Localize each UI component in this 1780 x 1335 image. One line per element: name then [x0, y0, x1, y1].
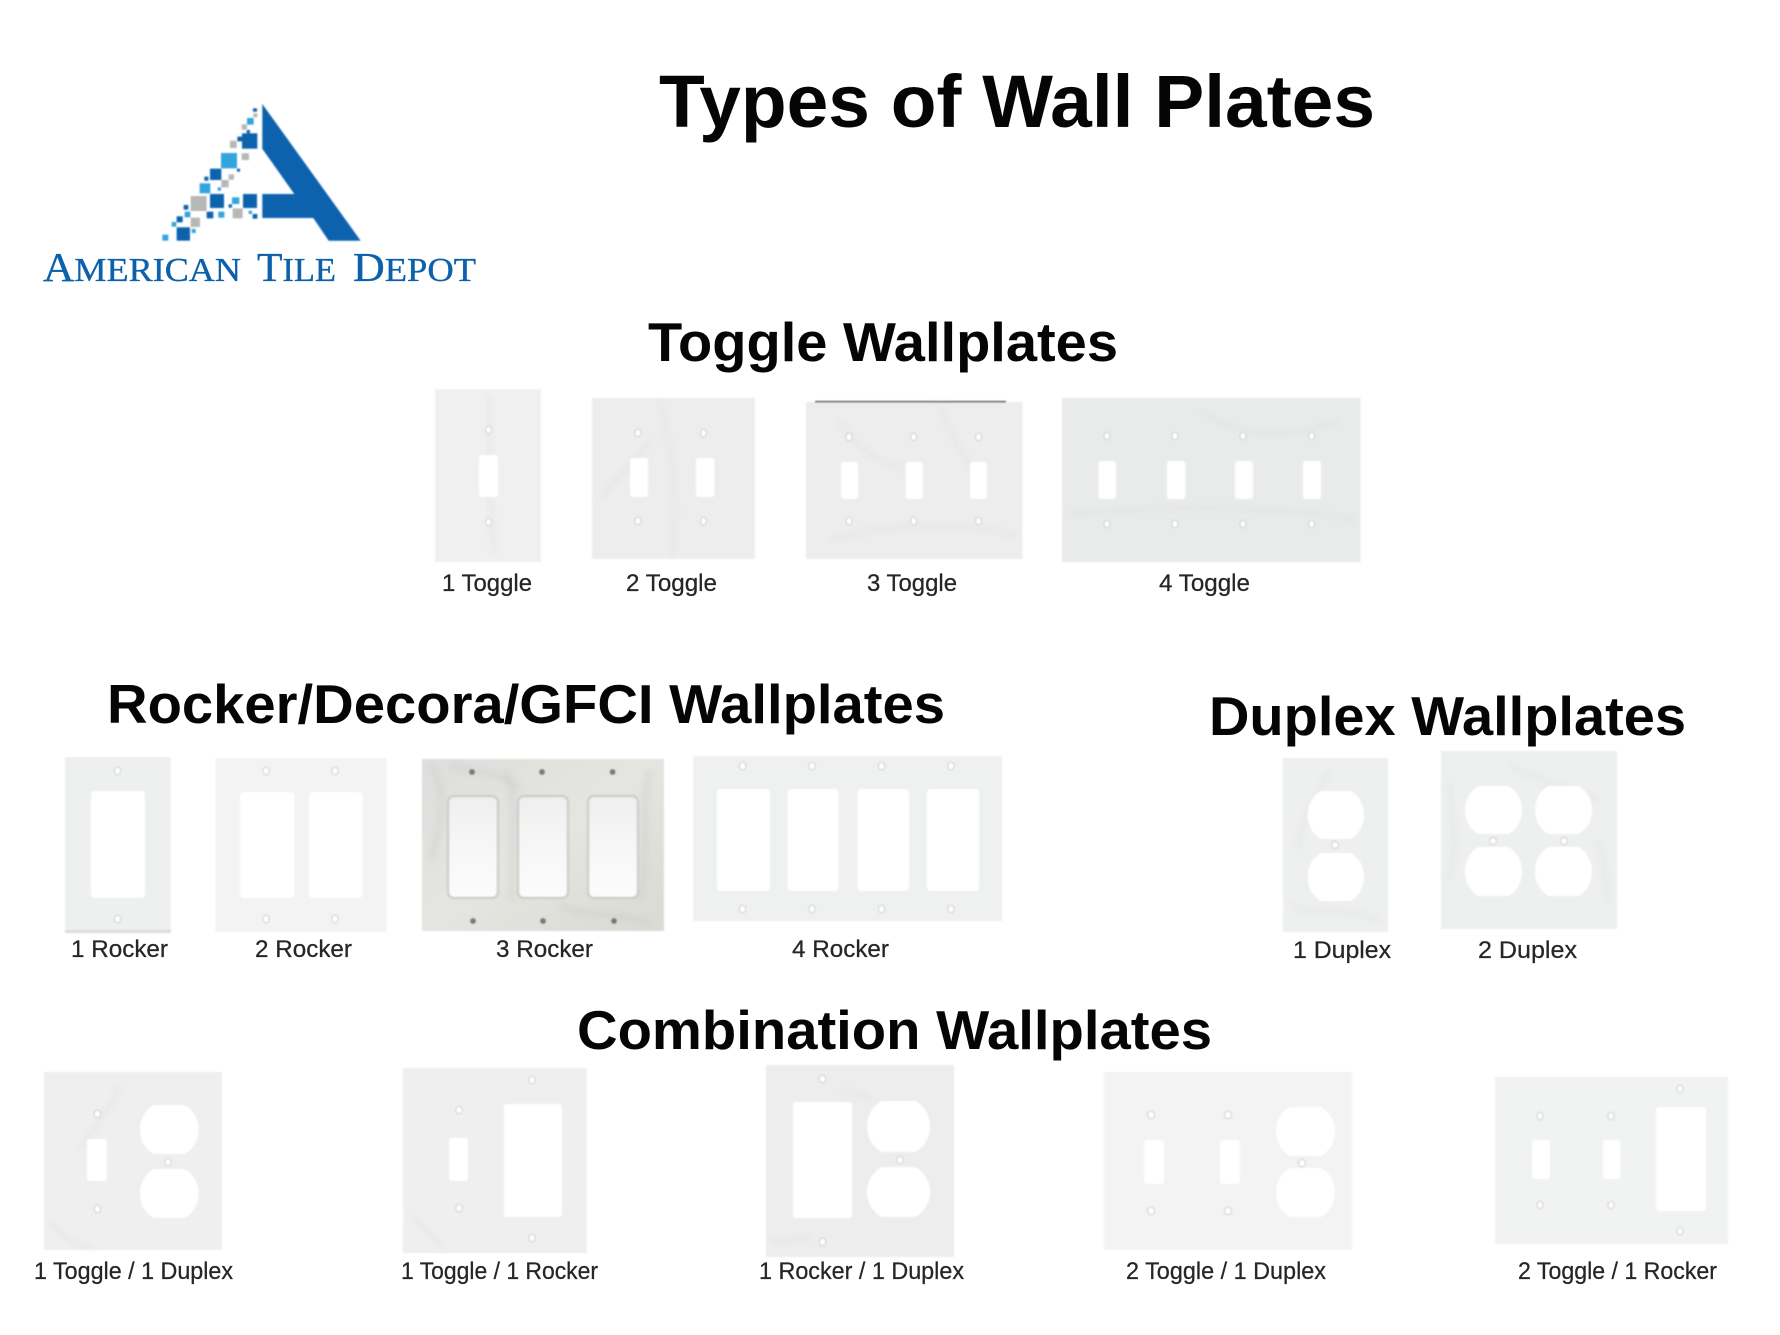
- label: 1 toggle / 1 duplex: 1 Toggle / 1 Duplex: [34, 1258, 233, 1285]
- plate: 1 toggle: [435, 389, 541, 562]
- plate: 2 duplex: [1441, 751, 1617, 929]
- icon: letter A mark: [162, 104, 361, 241]
- panel: combination wallplates: [34, 999, 1728, 1285]
- plate: 4 toggle: [1062, 398, 1361, 562]
- label: 2 toggle / 1 duplex: 2 Toggle / 1 Duplex: [1126, 1258, 1326, 1285]
- plate: 4 rocker: [693, 756, 1002, 921]
- label: 1 duplex: 1 Duplex: [1293, 937, 1391, 964]
- label: 1 toggle / 1 rocker: 1 Toggle / 1 Rocker: [401, 1258, 598, 1285]
- label: 1 rocker: 1 Rocker: [71, 936, 168, 963]
- plate: 1 duplex: [1283, 758, 1388, 932]
- label: 4 rocker: 4 Rocker: [792, 936, 889, 963]
- panel: toggle wallplates: [435, 311, 1361, 597]
- label: 3 toggle: 3 Toggle: [867, 570, 957, 597]
- logo wordmark: AMERICAN: [43, 244, 241, 290]
- label: 4 toggle: 4 Toggle: [1159, 570, 1250, 597]
- heading: toggle wallplates: Toggle Wallplates: [648, 311, 1118, 373]
- label: 2 duplex: 2 Duplex: [1478, 937, 1577, 964]
- plate: 1 toggle / 1 duplex: [44, 1072, 222, 1250]
- label: 2 rocker: 2 Rocker: [255, 936, 352, 963]
- heading: combination wallplates: Combination Wallplates: [577, 999, 1212, 1061]
- label: 1 rocker / 1 duplex: 1 Rocker / 1 Duplex: [759, 1258, 964, 1285]
- panel: duplex wallplates: [1209, 685, 1686, 964]
- logo: American Tile Depot: [43, 104, 476, 290]
- plate: 3 toggle: [806, 401, 1022, 559]
- label: 3 rocker: 3 Rocker: [496, 936, 593, 963]
- heading: duplex wallplates: Duplex Wallplates: [1209, 685, 1686, 747]
- plate: 1 rocker: [65, 757, 171, 933]
- plate: 1 toggle / 1 rocker: [403, 1068, 587, 1253]
- plate: 2 toggle / 1 rocker: [1495, 1077, 1728, 1244]
- heading: rocker wallplates: Rocker/Decora/GFCI Wallplates: [107, 673, 945, 735]
- logo wordmark: DEPOT: [353, 244, 476, 290]
- title: Types of Wall Plates: [659, 60, 1375, 143]
- panel: rocker/decora/GFCI wallplates: [65, 673, 1002, 963]
- plate: 2 toggle / 1 duplex: [1104, 1072, 1352, 1250]
- plate: 3 rocker: [422, 759, 664, 931]
- label: 1 toggle: 1 Toggle: [442, 570, 532, 597]
- plate: 1 rocker / 1 duplex: [766, 1065, 954, 1257]
- label: 2 toggle: 2 Toggle: [626, 570, 717, 597]
- logo wordmark: [43, 244, 476, 290]
- label: 2 toggle / 1 rocker: 2 Toggle / 1 Rocker: [1518, 1258, 1717, 1285]
- plate: 2 rocker: [216, 758, 386, 932]
- logo wordmark: TILE: [257, 244, 336, 290]
- plate: 2 toggle: [592, 398, 755, 559]
